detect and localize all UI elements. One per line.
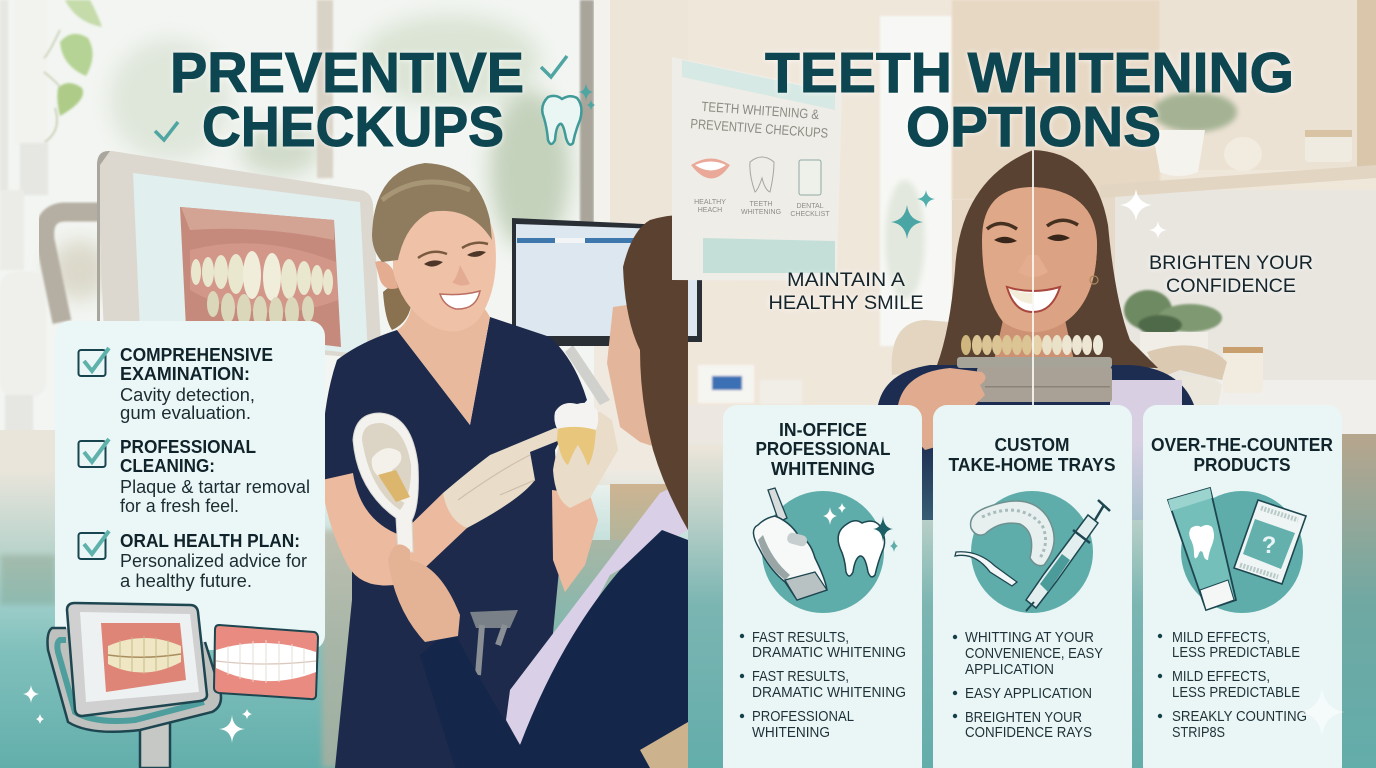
label: maintain a healthy smile: HEALTHY SMILE bbox=[768, 292, 924, 314]
card heading bbox=[948, 434, 1116, 475]
bullet list bbox=[953, 629, 1103, 741]
icon: toothpaste and strips: ? bbox=[1262, 532, 1276, 559]
icon: sparkle near tooth bbox=[579, 83, 593, 101]
item: comprehensive examination: gum evaluation. bbox=[120, 403, 251, 423]
sparkle: white small bbox=[1149, 221, 1167, 239]
card heading: CUSTOM bbox=[994, 434, 1070, 455]
bullet list: APPLICATION bbox=[965, 661, 1054, 678]
sparkles: lower left bbox=[23, 685, 252, 743]
title: teeth whitening options: OPTIONS bbox=[906, 95, 1161, 159]
shelf decor bbox=[698, 92, 1352, 405]
wall poster: WHITENING bbox=[741, 209, 781, 216]
bullet list: BREIGHTEN YOUR bbox=[965, 709, 1082, 726]
bullet list: EASY APPLICATION bbox=[965, 685, 1092, 702]
wall poster: DENTAL bbox=[796, 203, 824, 210]
panel: in-office professional whitening bbox=[723, 405, 922, 768]
title: preventive checkups bbox=[170, 41, 524, 159]
card heading: PRODUCTS bbox=[1194, 454, 1290, 475]
item: oral health plan: a healthy future. bbox=[120, 571, 252, 591]
right photo: whitening clinic scene bbox=[672, 0, 1376, 768]
panel: checkup list bbox=[55, 321, 325, 650]
title: teeth whitening options: TEETH WHITENING bbox=[765, 41, 1294, 105]
bullet list: FAST RESULTS, bbox=[752, 668, 849, 685]
label: brighten your confidence bbox=[1149, 252, 1313, 297]
wall poster: TEETH WHITENING & bbox=[701, 99, 820, 122]
card heading bbox=[1151, 434, 1333, 475]
card heading: OVER-THE-COUNTER bbox=[1151, 434, 1333, 455]
bullet list: WHITENING bbox=[752, 724, 830, 741]
sparkle: white large bbox=[1120, 189, 1152, 221]
bullet list: SREAKLY COUNTING bbox=[1172, 708, 1307, 725]
item: comprehensive examination: Cavity detection, bbox=[120, 385, 255, 405]
item: professional cleaning: Plaque & tartar removal bbox=[120, 477, 310, 497]
item: professional cleaning bbox=[78, 436, 310, 516]
left photo: dental checkup scene bbox=[0, 0, 688, 768]
card heading: IN-OFFICE bbox=[779, 419, 867, 440]
card heading: PROFESSIONAL bbox=[756, 438, 890, 459]
card heading bbox=[756, 419, 890, 479]
bullet list: CONFIDENCE RAYS bbox=[965, 724, 1092, 741]
label: maintain a healthy smile bbox=[768, 269, 924, 314]
panel: over-the-counter products bbox=[1143, 405, 1342, 768]
item: comprehensive examination: COMPREHENSIVE bbox=[120, 344, 273, 365]
bullet list: MILD EFFECTS, bbox=[1172, 629, 1270, 646]
dental light arm bbox=[0, 0, 48, 433]
icon: check mark top bbox=[541, 56, 567, 77]
hygienist bbox=[322, 163, 618, 768]
bullet list: PROFESSIONAL bbox=[752, 708, 854, 725]
bullet list: DRAMATIC WHITENING bbox=[752, 644, 906, 661]
panel: custom take-home trays bbox=[933, 405, 1132, 768]
plant leaves bbox=[44, 0, 102, 142]
handheld mirror bbox=[353, 413, 418, 552]
label: brighten your confidence: BRIGHTEN YOUR bbox=[1149, 252, 1313, 274]
item: professional cleaning: CLEANING: bbox=[120, 455, 215, 476]
sparkle: teal small bbox=[917, 190, 935, 208]
icon: check mark left bbox=[155, 122, 178, 140]
wall poster: HEALTHY bbox=[694, 199, 726, 206]
icon: whitening lamp and tooth bbox=[753, 488, 898, 613]
title: preventive checkups: CHECKUPS bbox=[202, 95, 504, 159]
sparkle: teal large bbox=[891, 205, 923, 239]
label: brighten your confidence: CONFIDENCE bbox=[1166, 275, 1296, 297]
sparkle: faint white lower right bbox=[1300, 688, 1344, 736]
divider line bbox=[1032, 150, 1034, 405]
bullet list: STRIP8S bbox=[1172, 724, 1225, 741]
item: oral health plan: Personalized advice for bbox=[120, 551, 307, 571]
card heading: TAKE-HOME TRAYS bbox=[948, 454, 1116, 475]
bullet list: CONVENIENCE, EASY bbox=[965, 645, 1103, 662]
shade guide bbox=[957, 335, 1112, 402]
item: professional cleaning: PROFESSIONAL bbox=[120, 436, 256, 457]
icon: small sparkle near tooth bbox=[587, 100, 595, 110]
icon: tooth outline bbox=[542, 96, 581, 145]
icon: tray, syringe and tip bbox=[955, 491, 1110, 613]
patient bbox=[388, 215, 688, 768]
wall poster bbox=[672, 57, 842, 281]
title: preventive checkups: PREVENTIVE bbox=[170, 41, 524, 105]
card heading: WHITENING bbox=[771, 458, 875, 479]
item: oral health plan bbox=[78, 530, 307, 591]
bullet list: MILD EFFECTS, bbox=[1172, 668, 1270, 685]
wall poster: CHECKLIST bbox=[790, 211, 830, 218]
bullet list bbox=[740, 629, 906, 741]
bullet list: WHITTING AT YOUR bbox=[965, 629, 1094, 646]
tooth model bbox=[554, 403, 598, 466]
background computer monitor bbox=[512, 218, 688, 405]
item: comprehensive examination bbox=[78, 344, 273, 423]
item: oral health plan: ORAL HEALTH PLAN: bbox=[120, 530, 300, 551]
wall poster: TEETH bbox=[750, 201, 772, 208]
bright divided smile portrait bbox=[878, 150, 1194, 520]
chairside monitor bbox=[97, 151, 382, 360]
icon: toothpaste and strips bbox=[1168, 488, 1306, 613]
illustration: teeth photo card bbox=[214, 625, 318, 699]
bullet list bbox=[1158, 629, 1307, 741]
label: maintain a healthy smile: MAINTAIN A bbox=[787, 269, 905, 291]
wall poster: HEACH bbox=[698, 207, 722, 214]
bullet list: DRAMATIC WHITENING bbox=[752, 684, 906, 701]
item: professional cleaning: for a fresh feel. bbox=[120, 496, 239, 516]
bullet list: LESS PREDICTABLE bbox=[1172, 684, 1300, 701]
item: comprehensive examination: EXAMINATION: bbox=[120, 363, 250, 384]
illustration: intraoral scanner tablet bbox=[48, 603, 221, 768]
bullet list: FAST RESULTS, bbox=[752, 629, 849, 646]
title: teeth whitening options bbox=[765, 41, 1294, 159]
bullet list: LESS PREDICTABLE bbox=[1172, 644, 1300, 661]
arm of dental unit bbox=[45, 212, 100, 322]
wall poster: PREVENTIVE CHECKUPS bbox=[690, 116, 829, 141]
